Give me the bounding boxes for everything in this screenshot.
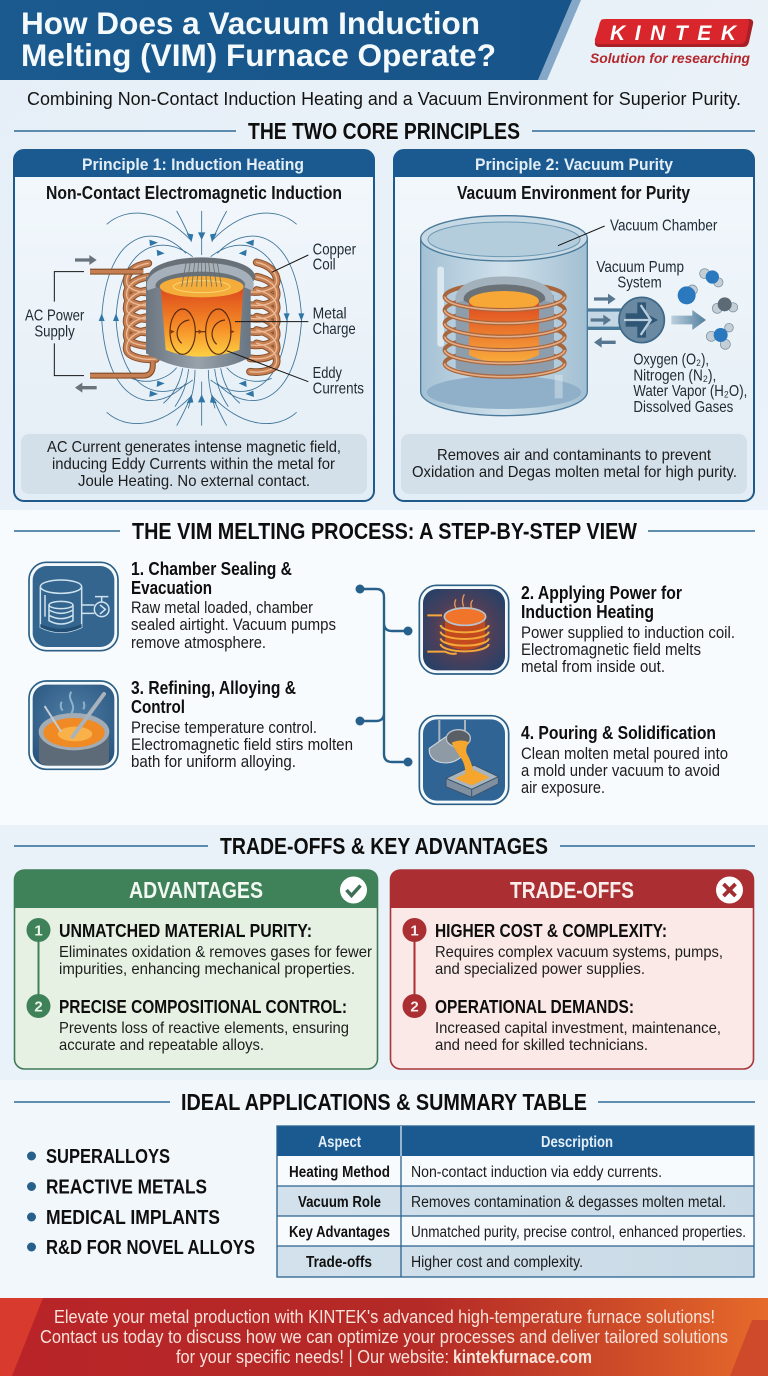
labels: Vacuum Pump (596, 259, 684, 276)
advantage 1: 1 (34, 922, 43, 940)
diagram: vacuum chamber (421, 216, 747, 416)
caption: induction (21, 434, 367, 494)
heading: the two core principles: THE TWO CORE PRINCIPLES (248, 118, 520, 144)
summary table (277, 1126, 754, 1277)
applications list: R&D FOR NOVEL ALLOYS (46, 1236, 255, 1259)
step 4 text: a mold under vacuum to avoid (521, 762, 720, 780)
pump pipe (581, 310, 622, 328)
applications list: REACTIVE METALS (46, 1176, 207, 1198)
heading: trade-offs and advantages: TRADE-OFFS & KEY ADVANTAGES (220, 833, 548, 859)
advantage 1: UNMATCHED MATERIAL PURITY: (59, 921, 312, 941)
power arrows (75, 255, 97, 393)
step 1 text: Evacuation (131, 577, 212, 598)
labels: Currents (313, 381, 364, 398)
step 2 text: Induction Heating (521, 601, 654, 622)
labels (596, 217, 747, 416)
vacuum pump (619, 297, 664, 343)
step 2 text (521, 582, 735, 676)
subtitle: Combining Non-Contact Induction Heating and a Vacuum Environment for Superior Purity. (27, 88, 741, 109)
advantage 2 (26, 994, 349, 1054)
labels: AC Power (25, 307, 84, 324)
applications list (27, 1145, 255, 1259)
advantage 2: 2 (34, 998, 43, 1016)
table row: vacuum role (298, 1194, 726, 1211)
KINTEK logo (590, 19, 753, 66)
step 4 text: Clean molten metal poured into (521, 745, 728, 763)
step 1 text: remove atmosphere. (131, 634, 266, 652)
step 3 text: Precise temperature control. (131, 719, 317, 737)
labels: Eddy (313, 365, 342, 382)
title: How Does a Vacuum Induction (21, 5, 480, 41)
flow arrows (591, 294, 706, 348)
advantage 1 (26, 918, 373, 978)
labels: Vacuum Chamber (610, 217, 717, 234)
coil and crucible (445, 277, 565, 377)
applications list: SUPERALLOYS (46, 1145, 170, 1168)
labels: Dissolved Gases (633, 399, 733, 416)
labels: Charge (313, 321, 356, 338)
process section background (0, 510, 768, 825)
title: Melting (VIM) Furnace Operate? (21, 37, 496, 73)
table row: heating method: Non-contact induction via eddy currents. (411, 1164, 662, 1181)
panel: trade-offs (390, 870, 754, 1069)
step 2 text: Electromagnetic field melts (521, 641, 701, 659)
step 3 text: 3. Refining, Alloying & (131, 677, 296, 698)
panel: advantages: ADVANTAGES (129, 877, 263, 903)
copper coil (90, 262, 277, 376)
trade-off 2: and need for skilled technicians. (435, 1037, 648, 1054)
trade-offs section background (0, 825, 768, 1080)
advantage 2: PRECISE COMPOSITIONAL CONTROL: (59, 997, 347, 1017)
caption: vacuum (401, 434, 747, 494)
footer call to action (0, 1298, 768, 1376)
trade-off 1: 1 (410, 922, 419, 940)
step 2 text: Power supplied to induction coil. (521, 624, 735, 642)
KINTEK logo: KINTEK (610, 22, 738, 45)
trade-off 2: Increased capital investment, maintenance, (435, 1020, 721, 1037)
step 2 text: 2. Applying Power for (521, 582, 682, 603)
table row: heating method (289, 1164, 662, 1181)
footer call to action: Elevate your metal production with KINTEK's advanced high-temperature furnace solutions! (54, 1307, 715, 1327)
step 2 text: metal from inside out. (521, 658, 665, 676)
labels: Nitrogen (N₂), (633, 367, 716, 384)
leader lines (54, 255, 308, 382)
KINTEK logo: Solution for researching (590, 50, 750, 66)
panel: principle 2 vacuum purity: Principle 2: Vacuum Purity (475, 155, 673, 174)
panel: principle 1 induction heating (14, 150, 374, 501)
caption: vacuum: Removes air and contaminants to prevent (437, 447, 712, 464)
diagram: induction furnace (25, 211, 364, 426)
table row: vacuum role: Removes contamination & degasses molten metal. (411, 1194, 726, 1211)
trade-off 2: OPERATIONAL DEMANDS: (435, 997, 634, 1017)
labels: Metal (313, 306, 347, 323)
step 1 text: 1. Chamber Sealing & (131, 558, 292, 579)
trade-off 2 (402, 994, 721, 1054)
icon: refining (29, 681, 118, 769)
icon: check (340, 876, 367, 904)
table row: vacuum role: Vacuum Role (298, 1194, 381, 1211)
table row: trade-offs: Trade-offs (306, 1254, 372, 1271)
step 4 text (521, 722, 728, 797)
step 4 text: air exposure. (521, 779, 605, 797)
labels (25, 241, 364, 398)
title (21, 5, 496, 73)
table row: heating method: Heating Method (289, 1164, 390, 1181)
panel: principle 2 vacuum purity: Vacuum Environment for Purity (457, 182, 691, 203)
caption: induction: Joule Heating. No external contact. (78, 473, 310, 490)
panel: advantages (14, 870, 378, 1069)
step 1 text (131, 558, 336, 652)
step 3 text: bath for uniform alloying. (131, 753, 296, 771)
advantage 2: accurate and repeatable alloys. (59, 1037, 264, 1054)
table row: key advantages (289, 1224, 746, 1241)
gas molecules (678, 269, 738, 349)
connector between steps (356, 584, 412, 766)
labels: Supply (34, 323, 75, 340)
step 3 (29, 677, 353, 771)
labels: Copper (313, 241, 356, 258)
table header: Aspect (318, 1134, 361, 1151)
step 3 text: Control (131, 696, 185, 717)
step 3 text: Electromagnetic field stirs molten (131, 736, 353, 754)
trade-off 1: and specialized power supplies. (435, 961, 645, 978)
trade-off 1: Requires complex vacuum systems, pumps, (435, 944, 723, 961)
advantage 1: impurities, enhancing mechanical properties. (59, 961, 355, 978)
footer call to action: kintekfurnace.com (453, 1347, 592, 1367)
advantage 1: Eliminates oxidation & removes gases for fewer (59, 944, 373, 961)
advantage 2: Prevents loss of reactive elements, ensuring (59, 1020, 349, 1037)
icon: induction coil (419, 585, 509, 674)
labels: System (617, 275, 662, 292)
caption: induction: AC Current generates intense magnetic field, (47, 439, 341, 456)
labels: Coil (313, 257, 336, 274)
heading: process: THE VIM MELTING PROCESS: A STEP-BY-STEP VIEW (132, 518, 638, 544)
labels: Water Vapor (H₂O), (633, 383, 747, 400)
step 3 text (131, 677, 353, 771)
step 1 text: Raw metal loaded, chamber (131, 599, 313, 617)
chamber cylinder (421, 216, 587, 416)
trade-off 1 (402, 918, 723, 978)
leader line (558, 226, 605, 246)
panel: trade-offs: TRADE-OFFS (510, 877, 634, 903)
step 1 text: sealed airtight. Vacuum pumps (131, 616, 336, 634)
panel: principle 1 induction heating: Non-Contact Electromagnetic Induction (46, 182, 342, 203)
step 4 (419, 716, 728, 804)
step 2 (419, 582, 735, 676)
icon: pouring (419, 716, 509, 804)
footer call to action: for your specific needs! | Our website: (176, 1347, 449, 1367)
eddy currents (170, 309, 235, 354)
table row: trade-offs: Higher cost and complexity. (411, 1254, 583, 1271)
labels: Oxygen (O₂), (633, 352, 709, 369)
applications list: MEDICAL IMPLANTS (46, 1206, 220, 1229)
table header: Description (541, 1134, 613, 1151)
header banner (0, 0, 581, 80)
table row: trade-offs (306, 1254, 583, 1271)
icon: vacuum chamber (29, 562, 118, 651)
panel: principle 2 vacuum purity (394, 150, 754, 501)
trade-off 1: HIGHER COST & COMPLEXITY: (435, 921, 667, 941)
caption: induction: inducing Eddy Currents within the metal for (52, 456, 336, 473)
heading: applications: IDEAL APPLICATIONS & SUMMARY TABLE (181, 1089, 587, 1115)
icon: cross (716, 876, 743, 904)
table row: key advantages: Key Advantages (289, 1224, 390, 1241)
caption: vacuum: Oxidation and Degas molten metal for high purity. (412, 464, 737, 481)
table header (318, 1134, 613, 1151)
step 4 text: 4. Pouring & Solidification (521, 722, 716, 743)
step 1 (29, 558, 336, 652)
trade-off 2: 2 (410, 998, 419, 1016)
applications section background (0, 1080, 768, 1298)
crucible (146, 257, 255, 369)
panel: principle 1 induction heating: Principle 1: Induction Heating (82, 155, 304, 174)
